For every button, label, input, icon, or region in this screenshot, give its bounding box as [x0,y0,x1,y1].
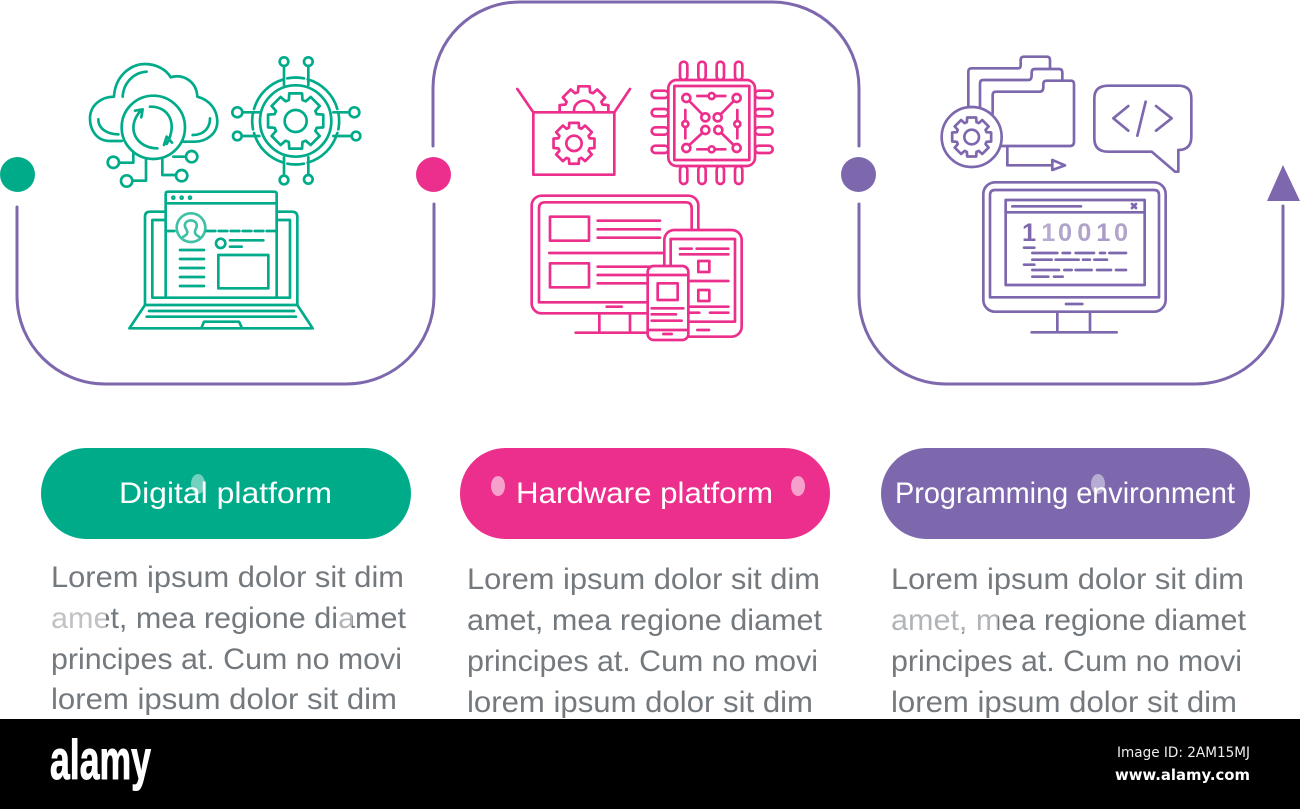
text block: hardware platform: lorem ipsum dolor sit dim [467,686,813,719]
panel: digital platform icons [90,57,360,328]
text block: programming environment: principes at. Cum no movi [891,645,1242,678]
text block: programming environment: lorem ipsum dolor sit dim [891,686,1237,719]
logo text: alamy: alamy [50,728,151,791]
text block: programming environment: Lorem ipsum dolor sit dim [891,563,1244,596]
icon: gear with circuit [232,57,360,184]
column: hardware platform [460,448,830,719]
column: programming environment [881,448,1250,719]
panel: hardware platform icons [517,62,773,340]
footer bar [0,719,1300,809]
website: www.alamy.com [1115,766,1250,784]
text block: programming environment [890,563,1247,719]
icon: monitor with binary code: 1 [1041,219,1055,247]
text block: hardware platform: Lorem ipsum dolor sit dim [467,563,820,596]
panel: programming environment icons [942,57,1191,332]
image id: Image ID: 2AM15MJ [1117,745,1250,761]
step marker: pink dot [416,157,451,192]
text block: hardware platform: amet, mea regione diamet [467,604,823,637]
icon: code speech bubble [1094,86,1191,172]
text block: programming environment: amet, mea regione diamet [891,604,1247,637]
icon: cloud sync [90,64,217,187]
text block: hardware platform [467,563,823,719]
step marker: green dot [0,157,35,192]
text block: digital platform: lorem ipsum dolor sit dim [51,683,397,716]
icon: monitor with binary code: 0 [1114,219,1128,247]
icon: folders with gear [942,57,1074,170]
icon: monitor with binary code: 0 [1058,219,1072,247]
pill heading: programming environment [881,448,1250,539]
text block: hardware platform: principes at. Cum no movi [467,645,818,678]
icon: processor chip [652,62,773,184]
icon: box with gears [517,86,630,175]
icon: responsive devices [532,196,742,340]
pill heading: hardware platform [460,448,830,539]
column: digital platform [41,448,411,716]
text block: digital platform: principes at. Cum no movi [51,643,402,676]
icon: laptop with profile window [129,192,313,328]
flow line connecting the three steps [17,2,1283,384]
text block: digital platform: amet, mea regione diamet [51,602,407,635]
step marker: purple dot [841,157,876,192]
text block: digital platform: Lorem ipsum dolor sit dim [51,561,404,594]
text block: digital platform [50,561,407,716]
icon: monitor with binary code [983,182,1166,332]
pill heading: digital platform [41,448,411,539]
arrowhead: end of flow [1267,165,1300,201]
icon: monitor with binary code: 0 [1077,219,1091,247]
pill heading: programming environment: Programming environment [895,477,1236,510]
icon: monitor with binary code: 1 [1022,219,1036,247]
icon: monitor with binary code: 1 [1096,219,1110,247]
pill heading: digital platform: Digital platform [119,477,332,510]
pill heading: hardware platform: Hardware platform [516,477,773,510]
